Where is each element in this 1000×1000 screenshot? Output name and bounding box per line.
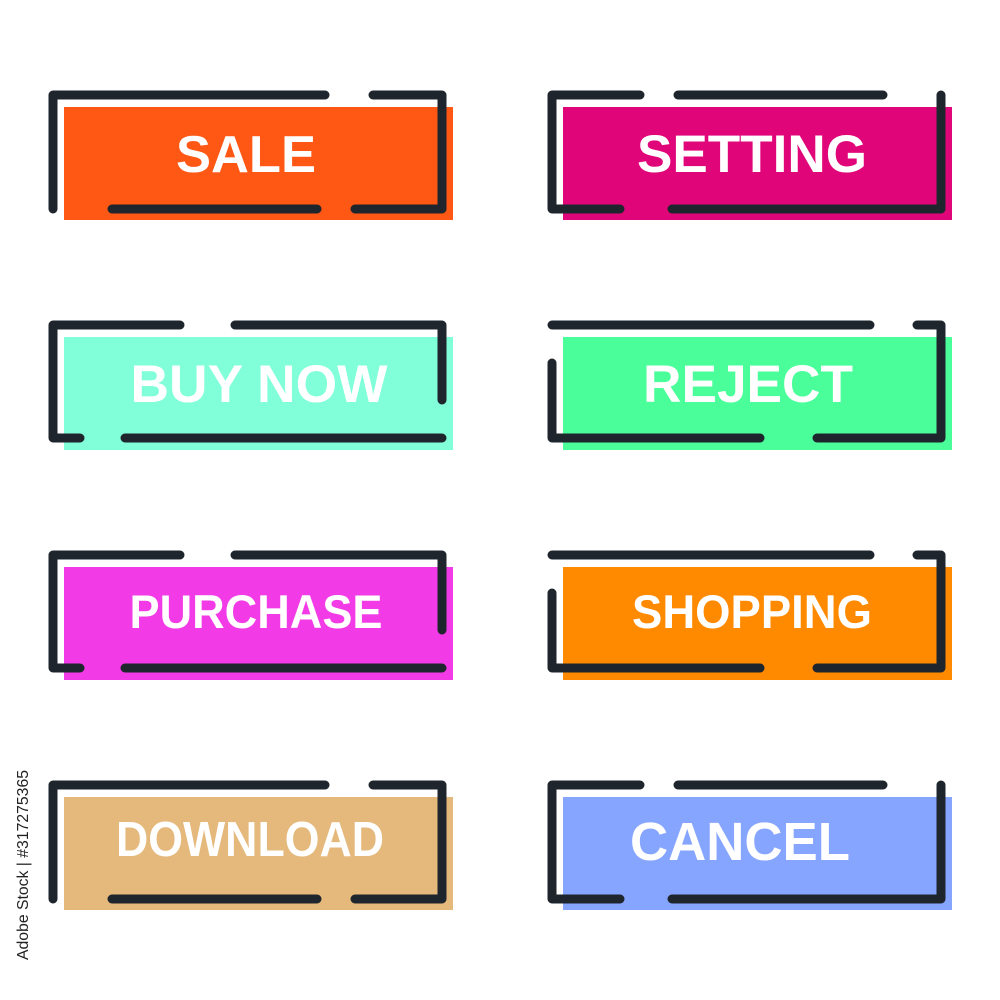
button: SALE (53, 95, 453, 220)
button: PURCHASE: PURCHASE (130, 585, 382, 638)
button: PURCHASE (53, 555, 453, 680)
stock id label: Adobe Stock | #317275365 (15, 770, 32, 960)
button: BUY NOW: BUY NOW (130, 355, 388, 414)
button: SALE: SALE (176, 126, 316, 184)
button: SHOPPING (552, 555, 952, 680)
button: SHOPPING: SHOPPING (632, 585, 872, 638)
button: CANCEL (552, 785, 952, 910)
button: SETTING: SETTING (637, 125, 867, 184)
button: SETTING (552, 95, 952, 220)
button: REJECT (552, 325, 952, 450)
button: BUY NOW (53, 325, 453, 450)
button: CANCEL: CANCEL (630, 812, 850, 872)
button: DOWNLOAD: DOWNLOAD (116, 813, 384, 867)
button: REJECT: REJECT (643, 355, 853, 414)
button: DOWNLOAD (53, 785, 453, 910)
